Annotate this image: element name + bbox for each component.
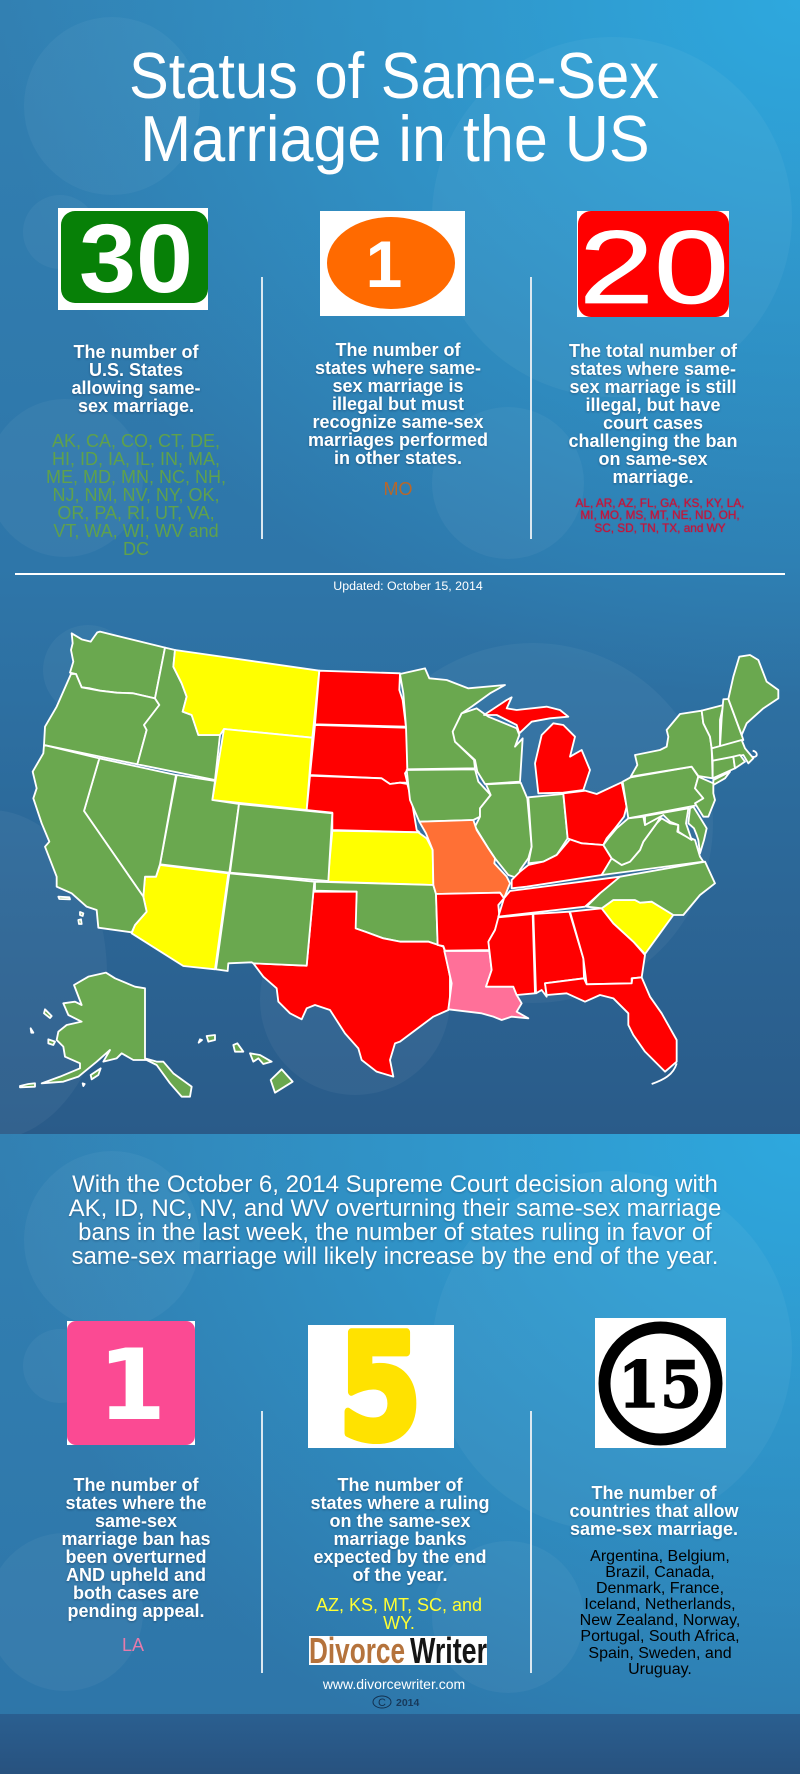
heading: illegal with court cases: court cases	[603, 413, 703, 433]
state: New Hampshire	[720, 699, 743, 747]
heading: states allowing: U.S. States	[89, 360, 183, 380]
text: country list: Argentina, Belgium,	[590, 1548, 730, 1565]
heading: ruling expected: The number of	[338, 1475, 462, 1495]
heading: overturned and upheld: both cases are	[73, 1583, 199, 1603]
text: copyright: 2014	[396, 1697, 420, 1709]
text: copyright: C	[378, 1697, 386, 1709]
text: expected state list: WY.	[383, 1613, 415, 1633]
map: US states	[19, 630, 780, 1098]
state: Vermont	[702, 705, 723, 748]
text: expected state list	[316, 1595, 482, 1633]
state: Kansas	[328, 831, 433, 885]
state: Georgia	[570, 908, 645, 984]
heading: states allowing: sex marriage.	[78, 396, 194, 416]
state: Wyoming	[212, 729, 312, 810]
state: Arizona	[132, 865, 228, 969]
state: Michigan	[484, 697, 590, 793]
state: Illinois	[475, 783, 532, 878]
text: allowing state list: DC	[123, 539, 149, 559]
state: Colorado	[230, 804, 332, 881]
state: New York	[631, 711, 713, 778]
state: Minnesota	[400, 668, 505, 769]
icon: 1 orange badge	[320, 211, 465, 316]
heading: countries: same-sex marriage.	[570, 1519, 738, 1539]
title: Status of Same-Sex	[129, 39, 659, 112]
heading: overturned and upheld: states where the	[65, 1493, 207, 1513]
text: summary paragraph: same-sex marriage will likely increase by the end of the year.	[72, 1243, 718, 1270]
heading: ruling expected: expected by the end	[313, 1547, 487, 1567]
icon: 1 pink badge	[67, 1321, 195, 1445]
state: Maryland	[645, 808, 692, 840]
state: North Carolina	[587, 862, 715, 915]
text: country list: Brazil, Canada,	[605, 1564, 715, 1581]
heading: illegal but recognize: states where same-	[315, 358, 481, 378]
text: challenged state list: AL, AR, AZ, FL, GA, KS, KY, LA,	[576, 496, 744, 510]
state: Arkansas	[436, 893, 504, 951]
state: Maine	[728, 655, 778, 735]
islands: California	[58, 897, 83, 924]
heading: countries: The number of	[592, 1483, 716, 1503]
state: Idaho	[137, 648, 220, 780]
text: updated date: Updated: October 15, 2014	[333, 579, 483, 593]
state: Washington	[70, 632, 165, 698]
state: Indiana	[528, 794, 568, 863]
heading: countries	[569, 1483, 739, 1541]
text: country list: Spain, Sweden, and	[588, 1645, 732, 1662]
heading: illegal with court cases: states where same-	[570, 359, 736, 379]
heading: ruling expected: states where a ruling	[310, 1493, 490, 1513]
heading: overturned and upheld: been overturned	[65, 1547, 207, 1567]
state: Mississippi	[486, 914, 535, 995]
panel: lower background with summary and stats	[0, 1134, 800, 1714]
state: Long Island	[713, 772, 730, 785]
divider: horizontal rule	[15, 573, 785, 575]
state: Hawaii	[199, 1035, 293, 1093]
text: country list: Uruguay.	[628, 1661, 692, 1678]
state: South Dakota	[310, 725, 407, 784]
text: LA: LA	[122, 1635, 144, 1655]
state: West Virginia	[603, 815, 662, 865]
icon: 1 pink badge: 1	[98, 1329, 166, 1443]
heading: overturned and upheld: AND upheld and	[66, 1565, 206, 1585]
text: country list: Portugal, South Africa,	[580, 1628, 740, 1645]
state: South Carolina	[602, 900, 673, 954]
state: Alabama	[533, 912, 584, 997]
state: New Mexico	[216, 873, 314, 971]
heading: overturned and upheld: The number of	[74, 1475, 198, 1495]
text: summary paragraph: With the October 6, 2014 Supreme Court decision along with	[72, 1171, 718, 1198]
text: country list: Iceland, Netherlands,	[584, 1596, 736, 1613]
text: country list: New Zealand, Norway,	[580, 1612, 740, 1629]
state: New Jersey	[695, 777, 715, 817]
state: Alaska	[20, 973, 192, 1097]
state: Missouri	[419, 820, 510, 898]
divider: column line 1	[261, 277, 263, 539]
state: Tennessee	[498, 877, 620, 917]
divider: lower column line 1	[261, 1411, 263, 1673]
text: allowing state list: VT, WA, WI, WV and	[53, 521, 219, 541]
text: country list	[580, 1548, 740, 1678]
islands: Florida Keys	[652, 1063, 677, 1084]
heading: states allowing	[71, 342, 201, 418]
text: website: www.divorcewriter.com	[323, 1676, 465, 1692]
title: Marriage in the US	[140, 102, 650, 175]
text: MO: MO	[384, 479, 412, 499]
state: Delmarva peninsula	[688, 807, 707, 853]
heading: illegal with court cases: illegal, but have	[585, 395, 721, 415]
heading: states allowing: The number of	[74, 342, 198, 362]
icon: 1 orange badge: 1	[366, 227, 402, 301]
text: challenged state list	[575, 496, 744, 535]
heading: illegal with court cases: sex marriage is still	[569, 377, 737, 397]
state: Kentucky	[512, 839, 612, 888]
text: allowing state list: NJ, NM, NV, NY, OK,	[52, 485, 220, 505]
state: Utah	[160, 775, 239, 873]
heading: illegal with court cases: on same-sex	[598, 449, 708, 469]
text: expected state list: AZ, KS, MT, SC, and	[316, 1595, 482, 1615]
text: summary paragraph	[68, 1171, 721, 1271]
heading: illegal but recognize: The number of	[336, 340, 460, 360]
heading: ruling expected	[310, 1475, 490, 1587]
heading: overturned and upheld	[61, 1475, 211, 1623]
state: California	[33, 745, 147, 932]
heading: illegal but recognize	[308, 340, 488, 468]
text: allowing state list: AK, CA, CO, CT, DE,	[52, 431, 220, 451]
heading: illegal but recognize: recognize same-sex	[312, 412, 484, 432]
state: Rhode Island	[733, 755, 745, 768]
heading: illegal with court cases: The total number of	[569, 341, 737, 361]
state: Pennsylvania	[623, 767, 703, 818]
panel: upper background with title, stats and map	[0, 0, 800, 1134]
heading: countries: countries that allow	[569, 1501, 739, 1521]
heading: illegal but recognize: in other states.	[334, 448, 462, 468]
heading: overturned and upheld: pending appeal.	[67, 1601, 204, 1621]
heading: overturned and upheld: marriage ban has	[61, 1529, 211, 1549]
text: allowing state list: ME, MD, MN, NC, NH,	[46, 467, 226, 487]
icon: 15 ring badge	[595, 1318, 726, 1448]
icon: 5 yellow badge	[308, 1325, 454, 1448]
state: Cape Cod	[752, 751, 757, 757]
heading: illegal with court cases: marriage.	[612, 467, 694, 487]
heading: illegal but recognize: marriages performed	[308, 430, 488, 450]
text: allowing state list: HI, ID, IA, IL, IN, MA,	[52, 449, 220, 469]
heading: ruling expected: on the same-sex	[329, 1511, 471, 1531]
text: challenged state list: MI, MO, MS, MT, NE, ND, OH,	[580, 508, 740, 522]
heading: illegal with court cases: challenging the ban	[568, 431, 738, 451]
text: allowing state list	[46, 431, 226, 559]
divider: column line 2	[530, 277, 532, 539]
text: challenged state list: SC, SD, TN, TX, and WY	[594, 521, 726, 535]
heading: ruling expected: of the year.	[352, 1565, 448, 1585]
state: Louisiana	[444, 951, 528, 1020]
heading: states allowing: allowing same-	[71, 378, 201, 398]
state: Nevada	[84, 758, 176, 897]
state: Iowa	[407, 769, 491, 822]
state: Texas	[253, 892, 450, 1077]
heading: illegal with court cases	[568, 341, 738, 489]
state: Wisconsin	[453, 708, 523, 784]
panel: dark footer band	[0, 1714, 800, 1774]
text: allowing state list: OR, PA, RI, UT, VA,	[57, 503, 215, 523]
state: Oregon	[44, 674, 159, 764]
state: Ohio	[563, 782, 627, 845]
text: country list: Denmark, France,	[596, 1580, 724, 1597]
text: copyright	[372, 1696, 420, 1709]
heading: illegal but recognize: illegal but must	[332, 394, 464, 414]
divider: lower column line 2	[530, 1411, 532, 1673]
state: Massachusetts	[712, 740, 753, 763]
state: Connecticut	[713, 757, 735, 778]
title	[129, 39, 659, 175]
text: summary paragraph: AK, ID, NC, NV, and WV overturning their same-sex marriage	[69, 1195, 721, 1222]
state: Nebraska	[307, 776, 419, 832]
heading: overturned and upheld: same-sex	[95, 1511, 177, 1531]
state: North Dakota	[315, 671, 406, 727]
state: Florida	[545, 977, 677, 1072]
text: summary paragraph: bans in the last week, the number of states ruling in favor of	[78, 1219, 712, 1246]
heading: ruling expected: marriage banks	[333, 1529, 467, 1549]
state: Montana	[173, 650, 319, 738]
state: Oklahoma	[315, 882, 438, 945]
state: Virginia	[602, 818, 703, 875]
heading: illegal but recognize: sex marriage is	[332, 376, 464, 396]
icon: 15 ring badge: 15	[618, 1348, 702, 1423]
